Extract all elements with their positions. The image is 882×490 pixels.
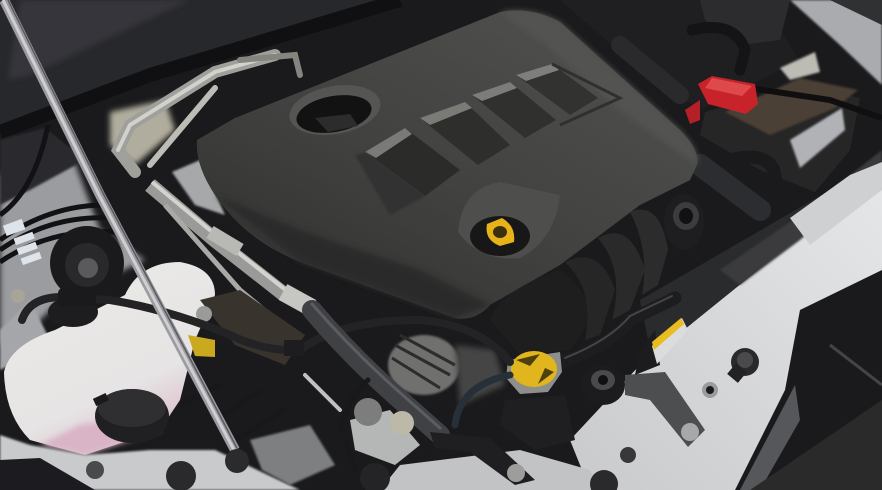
icon: horn: [11, 226, 124, 303]
icon: reservoir cap: [93, 389, 169, 443]
intake manifold runners: [490, 210, 668, 355]
black rubber ring: [664, 194, 704, 250]
panel: white radiator support right: [570, 150, 882, 490]
wiring loom left: [0, 125, 115, 262]
panel: hood underside top left: [0, 0, 400, 132]
bracket on radiator support: [625, 330, 705, 447]
white cable tags: [3, 219, 42, 265]
radiator cap: [506, 351, 562, 394]
panel: silver inner wing left: [0, 128, 145, 370]
large silver AC pipe: [150, 182, 312, 340]
cover ridges: [365, 128, 460, 196]
panel: battery: [700, 52, 882, 192]
black hoses right: [620, 28, 776, 210]
panel: engine cover: [197, 10, 697, 319]
icon: red battery terminal cover: [685, 76, 758, 124]
reservoir top behind pipes: [110, 100, 225, 215]
panel: alternator and lower engine: [388, 335, 575, 450]
panel: engine bay right dark background: [560, 0, 882, 110]
dark bracket under pipe: [188, 290, 305, 365]
black filler neck bolt: [581, 365, 625, 405]
icon: yellow oil cap: [487, 218, 514, 246]
prop rod: [3, 0, 238, 450]
panel: bottom components: [0, 398, 618, 490]
heater hoses: [22, 297, 510, 470]
radiator upper hose: [562, 296, 675, 362]
hose connector and horn bracket: [48, 288, 304, 356]
panel: washer tank: [4, 262, 215, 455]
oil cap recess: [458, 182, 560, 258]
yellow caution label: [652, 318, 688, 364]
oil filler recess: [286, 78, 384, 142]
silver AC pipes top: [118, 55, 300, 172]
